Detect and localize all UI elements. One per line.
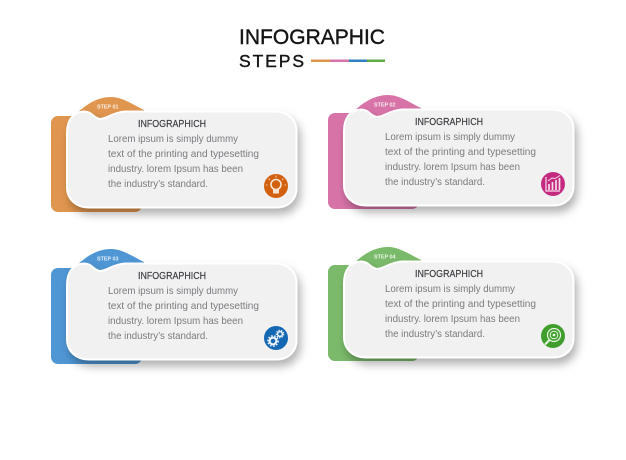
step label: STEP 04 [374,254,395,260]
text block: Lorem ipsum is simply dummy [385,131,516,143]
text block [108,133,259,190]
text block: text of the printing and typesetting [108,148,259,160]
text block [385,283,536,340]
text block: industry. lorem Ipsum has been [385,161,520,173]
title [239,25,385,71]
icon: light bulb [264,174,288,198]
text block: the industry’s standard. [385,176,485,188]
card [344,110,574,206]
panel: step 01 [51,97,296,212]
text block: the industry’s standard. [108,330,208,342]
text block: text of the printing and typesetting [385,146,536,158]
text block: text of the printing and typesetting [108,300,259,312]
heading: INFOGRAPHICH [415,117,483,128]
icon: bar chart [541,172,565,196]
title colour line [311,60,385,62]
card [67,112,296,208]
step label: STEP 03 [97,256,118,262]
step label: STEP 01 [97,104,118,110]
back shape [328,265,419,361]
text block: industry. lorem Ipsum has been [108,315,243,327]
step label: STEP 02 [374,102,395,108]
text block: industry. lorem Ipsum has been [385,313,520,325]
text block: Lorem ipsum is simply dummy [108,133,239,145]
back shape [51,116,142,212]
title: STEPS [239,51,304,71]
step tab [74,97,144,118]
text block: Lorem ipsum is simply dummy [385,283,516,295]
text block: the industry’s standard. [108,178,208,190]
text block: text of the printing and typesetting [385,298,536,310]
icon: gears [264,326,288,350]
icon: target magnifier [541,324,565,348]
heading: INFOGRAPHICH [415,269,483,280]
panel: step 04 [328,247,574,361]
text block: industry. lorem Ipsum has been [108,163,243,175]
heading: INFOGRAPHICH [138,271,206,282]
card [67,264,296,360]
card [344,262,574,358]
back shape [51,268,142,364]
panel: step 02 [328,95,574,209]
step tab [351,95,421,116]
text block [385,131,536,188]
text block [108,285,259,342]
step tab [351,247,421,268]
back shape [328,113,419,209]
text block: Lorem ipsum is simply dummy [108,285,239,297]
text block: the industry’s standard. [385,328,485,340]
heading: INFOGRAPHICH [138,119,206,130]
title: INFOGRAPHIC [239,25,385,49]
step tab [74,249,144,270]
panel: step 03 [51,249,296,364]
